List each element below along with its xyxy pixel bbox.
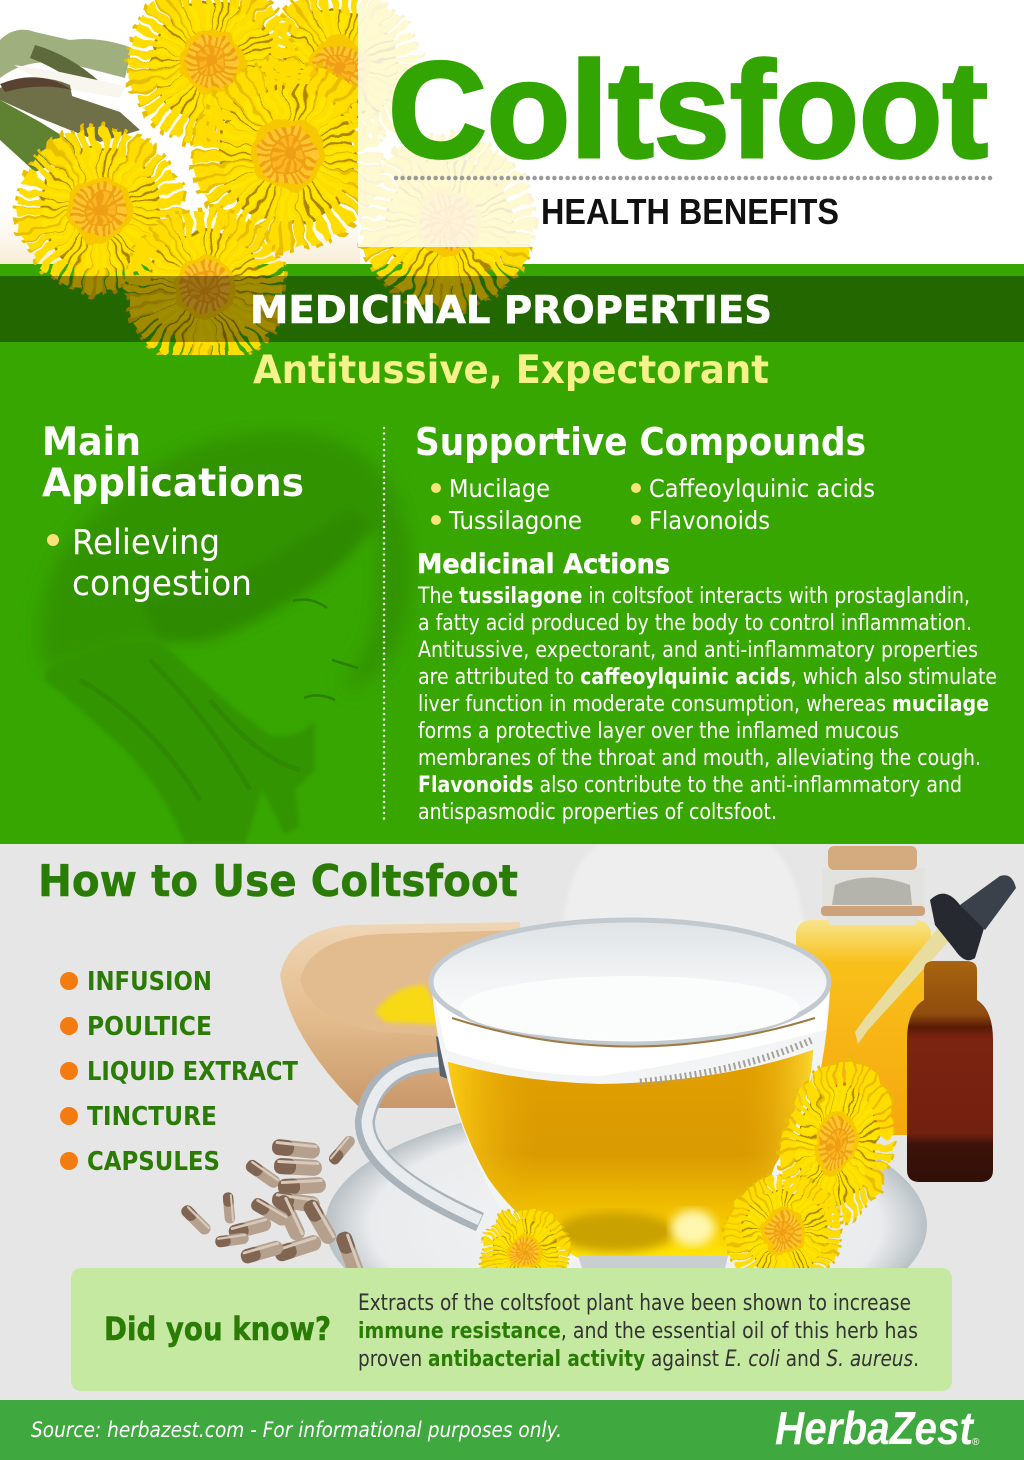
block: supportive compounds: Supportive Compounds <box>415 420 866 464</box>
block: main applications: Applications <box>42 461 304 506</box>
list: forms of use: INFUSION <box>87 967 212 997</box>
panel: medicinal properties <box>0 276 1024 825</box>
cloth bag <box>563 844 808 950</box>
block: supportive compounds: Tussilagone <box>448 506 582 535</box>
icon: flower buds <box>0 30 140 172</box>
saucer <box>326 1123 927 1268</box>
image: tea cup, bottles, capsules and flowers <box>181 846 1016 1268</box>
footer <box>0 1400 1024 1460</box>
block: medicinal actions: are attributed to caffeoylquinic acids, which also stimulate <box>418 664 997 690</box>
yellow oil bottle <box>796 846 931 1135</box>
heading: properties list: Antitussive, Expectorant <box>253 348 769 393</box>
handle <box>365 1062 480 1222</box>
icon: yellow flowers <box>39 1 512 346</box>
image: coughing woman <box>41 432 411 844</box>
block: supportive compounds: Mucilage <box>449 474 550 503</box>
block: supportive compounds: Flavonoids <box>649 506 770 535</box>
subtitle: HEALTH BENEFITS <box>541 191 839 232</box>
wooden bowl <box>280 922 520 1108</box>
capsules <box>181 1136 364 1268</box>
block: supportive compounds <box>415 420 875 535</box>
block: medicinal actions: Medicinal Actions <box>417 549 670 580</box>
callout: did you know: proven antibacterial activity against E. coli and S. aureus. <box>358 1346 919 1372</box>
list: forms of use: TINCTURE <box>87 1102 217 1132</box>
logo: HerbaZest: HerbaZest <box>775 1402 974 1454</box>
block: main applications: Relieving <box>72 523 220 563</box>
heading: medicinal properties: MEDICINAL PROPERTIES <box>250 288 772 332</box>
list: forms of use: POULTICE <box>87 1012 212 1042</box>
callout: did you know <box>71 1268 952 1391</box>
panel: how to use <box>0 844 1024 1400</box>
glass cup <box>431 920 830 1268</box>
block: medicinal actions: Flavonoids also contribute to the anti-inflammatory and <box>418 772 962 798</box>
callout: did you know: Did you know? <box>104 1310 331 1348</box>
block: medicinal actions <box>417 549 997 825</box>
title: Coltsfoot <box>388 34 988 187</box>
block: main applications <box>42 420 304 604</box>
block: main applications: Main <box>42 420 141 465</box>
green panel base <box>0 264 1024 844</box>
list: forms of use: LIQUID EXTRACT <box>87 1057 298 1087</box>
source note: Source: herbazest.com - For informational purposes only. <box>31 1418 562 1442</box>
block: supportive compounds: Caffeoylquinic acids <box>649 474 875 503</box>
block: medicinal actions: forms a protective layer over the inflamed mucous <box>418 718 899 744</box>
callout: did you know: Extracts of the coltsfoot plant have been shown to increase <box>358 1290 911 1316</box>
list: forms of use <box>60 967 298 1177</box>
dropper and brown bottle <box>855 875 1016 1182</box>
footer: ® <box>972 1437 980 1448</box>
block: medicinal actions: antispasmodic properties of coltsfoot. <box>418 799 777 825</box>
block: main applications: congestion <box>72 564 252 604</box>
callout: did you know: immune resistance, and the essential oil of this herb has <box>358 1318 918 1344</box>
block: medicinal actions: liver function in moderate consumption, whereas mucilage <box>418 691 989 717</box>
photo: coltsfoot buds and flowers <box>0 1 512 346</box>
flowers on saucer <box>492 1076 890 1285</box>
heading: how to use coltsfoot: How to Use Coltsfoot <box>38 856 518 907</box>
list: forms of use: CAPSULES <box>87 1147 220 1177</box>
white wash over flowers behind title <box>358 0 1024 247</box>
